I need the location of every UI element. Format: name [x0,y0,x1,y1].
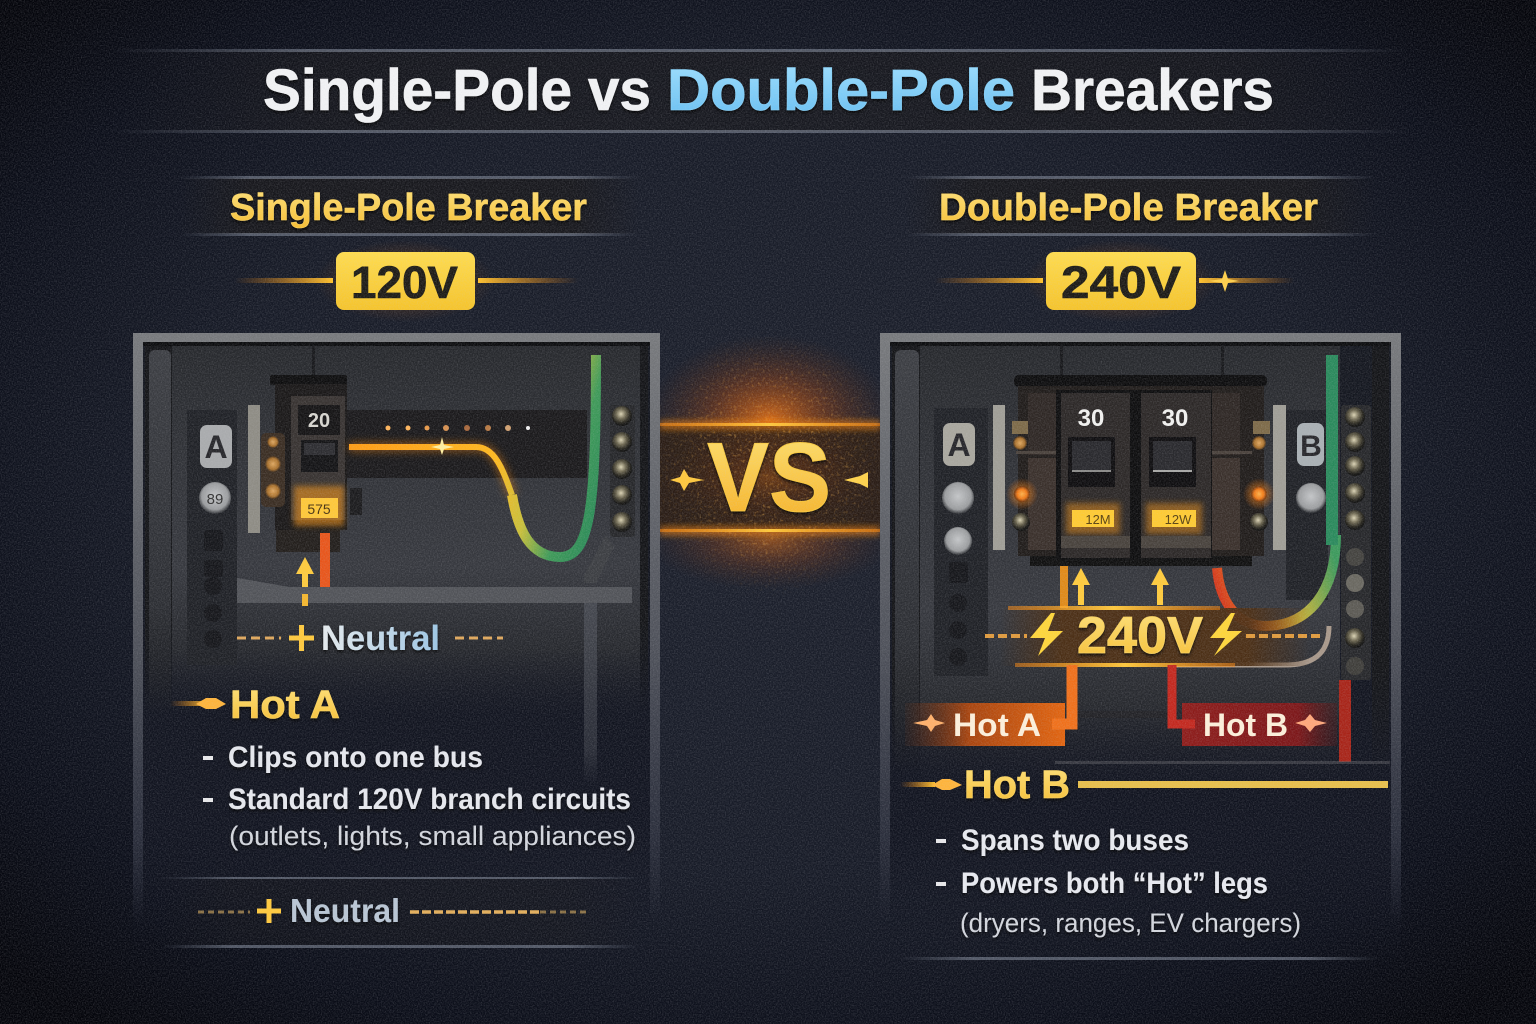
feature list: double-pole: Powers both “Hot” legs [961,867,1268,900]
pole 1: 30 [1078,405,1104,432]
bus strip A [934,408,988,676]
grey conduit wire [584,603,597,785]
pole 2 [1141,393,1211,558]
dark bus rail [347,410,587,478]
title: Double-Pole [667,58,1015,123]
bus strip A: A [204,429,228,465]
voltage badge: 240V: 240V [1061,257,1181,308]
label: hot B bar: Hot B [964,763,1070,807]
bus strip A: 89 [207,491,223,508]
panel enclosure [880,333,1401,961]
up arrow left [1072,568,1090,605]
silver contact strip left [993,405,1005,550]
panel enclosure [133,333,660,945]
feature list: single-pole: Standard 120V branch circuits [228,783,631,816]
bus strip B [1286,410,1328,600]
pole 1 [1061,393,1130,558]
feature list: double-pole [936,824,1301,938]
label tag: hot A [905,665,1072,746]
VS emblem: VS [707,422,831,532]
label: neutral: Neutral [321,619,440,658]
feature list: single-pole [203,741,636,851]
240V callout [985,606,1322,667]
label: hot A: Hot A [230,683,340,727]
footer band: neutral [160,877,640,948]
voltage badge: 120V [235,240,578,322]
ground terminals [584,405,635,583]
title: Single-Pole vs [263,58,651,123]
footer band: neutral: Neutral [290,892,400,929]
label: hot A [170,683,340,727]
green and red wire [1217,355,1338,626]
terminal block [261,433,285,507]
title [263,58,1274,123]
bus strip A: A [947,427,971,463]
silver contact strip right [1273,405,1286,550]
connector bar [1078,711,1168,718]
up arrow [296,557,314,606]
neutral bar [237,578,632,603]
title: Breakers [1031,58,1274,123]
label: hot B bar [900,761,1390,807]
beige wire [1170,626,1329,665]
feature list: single-pole: Clips onto one bus [228,741,483,774]
label: neutral [237,619,503,658]
feature list: double-pole: Spans two buses [961,824,1189,857]
heading: single-pole breaker: Single-Pole Breaker [230,187,587,229]
voltage badge: 120V: 120V [351,257,458,308]
right side terminals [1243,421,1275,531]
panel: single-pole breaker [133,333,660,948]
panel base line [900,957,1380,960]
breaker 20A: 20 [308,410,330,432]
bus strip A [187,410,237,665]
breaker 20A [270,375,362,552]
VS emblem [660,338,880,590]
pole 2: 12W [1165,512,1192,527]
label tag: hot A: Hot A [953,707,1041,743]
voltage badge: 240V [935,240,1294,322]
pole 2: 30 [1162,405,1188,432]
bus strip B: B [1300,430,1322,463]
hot wire stub [1060,566,1068,610]
heading band: double-pole [905,176,1375,236]
red feed wire [1339,680,1351,762]
feature list: double-pole: (dryers, ranges, EV chargers) [960,908,1301,938]
240V callout: 240V [1077,607,1203,665]
heading: double-pole breaker: Double-Pole Breaker [939,187,1318,229]
hot wire stub [320,533,330,587]
hot wire to neutral loop [349,355,596,557]
label tag: hot B [1172,665,1337,746]
feature list: single-pole: (outlets, lights, small appliances) [229,821,636,851]
double breaker 30A [1006,375,1275,566]
breaker 20A: 575 [307,501,331,517]
silver contact strip [248,405,260,533]
heading band: single-pole [180,176,640,236]
left side terminals [1006,421,1038,531]
up arrow right [1151,568,1169,605]
panel: double-pole breaker [880,333,1401,961]
ground terminals [1341,405,1371,680]
title band [110,49,1410,133]
pole 1: 12M [1085,512,1111,527]
label tag: hot B: Hot B [1203,707,1288,743]
